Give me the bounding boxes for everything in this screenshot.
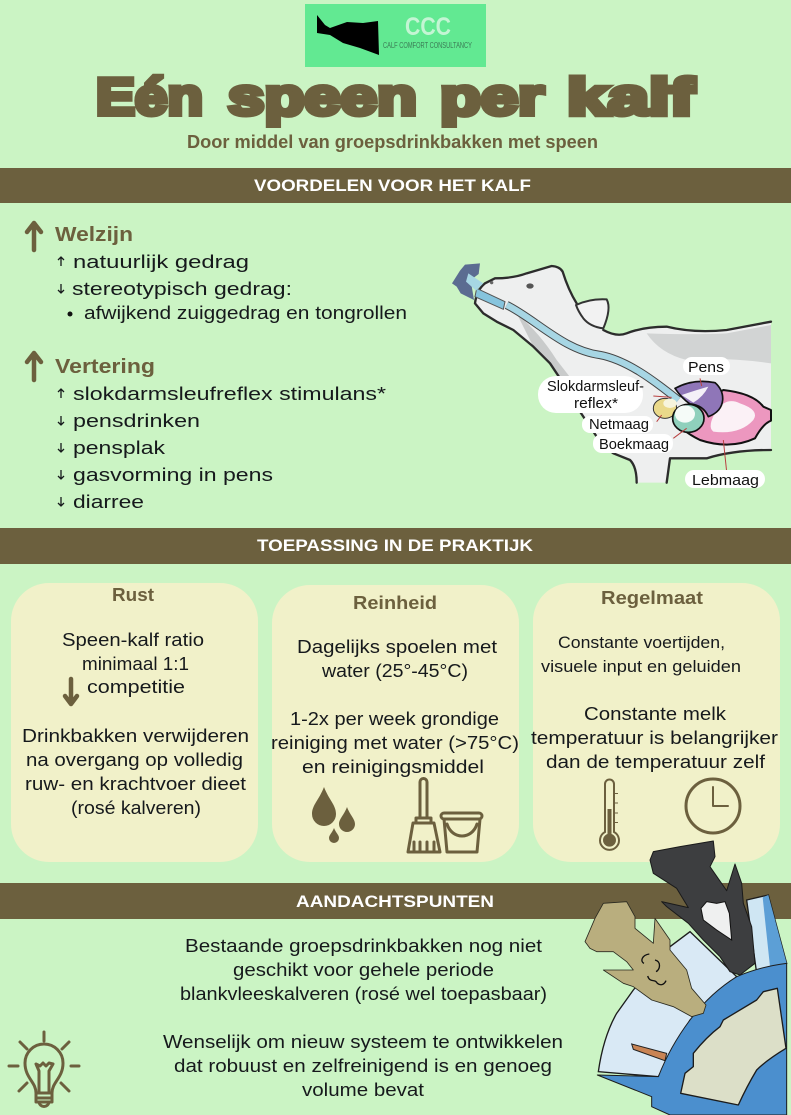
list: welzijn: natuurlijk gedrag [73,251,249,272]
icon: thermometer [600,780,619,850]
logo: CCC [405,13,451,41]
label: boekmaag: Boekmaag [599,436,669,453]
list: vertering: pensdrinken [73,410,200,431]
label: pens [683,357,730,376]
panel: regelmaat [531,583,780,862]
label: slokdarmsleuf-reflex [538,376,644,413]
label: lebmaag [685,470,765,489]
label: netmaag: Netmaag [589,416,649,433]
section header: toepassing: TOEPASSING IN DE PRAKTIJK [257,536,534,555]
title: Eén [96,68,203,126]
list: vertering: slokdarmsleufreflex stimulans* [73,383,386,404]
title: kalf [567,68,695,126]
label: lebmaag: Lebmaag [692,472,759,489]
text: aandachtspunten: blankvleeskalveren (rosé wel toepasbaar) [180,983,547,1004]
icon: water drops [312,787,355,843]
text: rust: competitie [87,676,185,697]
text: regelmaat: visuele input en geluiden [541,658,741,676]
text: reinheid [271,636,519,777]
list: welzijn: afwijkend zuiggedrag en tongrollen [84,302,407,323]
text: aandachtspunten: Bestaande groepsdrinkbakken nog niet [185,935,542,956]
illustration: calves at group drinking trough [585,841,787,1115]
text: reinheid: reiniging met water (>75°C) [271,732,519,753]
text: aandachtspunten [163,935,563,1100]
icon: light bulb [9,1032,79,1106]
title: per [440,68,544,126]
text: reinheid: water (25°-45°C) [321,660,468,681]
text: reinheid: en reinigingsmiddel [302,756,484,777]
text: rust: na overgang op volledig [26,749,243,770]
heading: welzijn: Welzijn [55,224,133,246]
icon: broom and bucket [408,779,482,852]
text: rust: (rosé kalveren) [71,797,201,818]
section header: aandachtspunten: AANDACHTSPUNTEN [296,892,494,911]
list: vertering: pensplak [73,437,166,458]
icon: arrow down [65,679,77,704]
text: aandachtspunten: Wenselijk om nieuw systeem te ontwikkelen [163,1031,563,1052]
subtitle: Door middel van groepsdrinkbakken met speen [187,132,598,152]
list: welzijn: stereotypisch gedrag: [72,278,292,299]
text: reinheid: Dagelijks spoelen met [297,636,497,657]
logo: CALF COMFORT CONSULTANCY [383,40,472,50]
text: rust: Drinkbakken verwijderen [22,725,249,746]
heading: rust: Rust [112,585,154,605]
logo [305,4,486,67]
text: reinheid: 1-2x per week grondige [290,708,499,729]
section header: voordelen: VOORDELEN VOOR HET KALF [254,176,531,195]
text: regelmaat: dan de temperatuur zelf [546,751,766,772]
label: pens: Pens [688,359,724,376]
heading: reinheid: Reinheid [353,593,437,613]
text: aandachtspunten: dat robuust en zelfreinigend is en genoeg [174,1055,552,1076]
text: rust: ruw- en krachtvoer dieet [25,773,246,794]
icon: clock [686,779,740,833]
text: aandachtspunten: volume bevat [302,1079,424,1100]
panel: rust [11,583,258,862]
text: rust: Speen-kalf ratio [62,629,204,650]
list: vertering: gasvorming in pens [73,464,273,485]
list: vertering: diarree [73,491,144,512]
list: vertering [58,383,386,512]
title [96,68,695,126]
section header: aandachtspunten [0,883,791,919]
text: rust [22,629,249,818]
illustration: calf digestive system [452,263,771,489]
text: regelmaat: Constante melk [584,703,727,724]
text: rust: minimaal 1:1 [82,653,189,674]
heading: regelmaat: Regelmaat [601,588,703,608]
text: regelmaat: Constante voertijden, [558,634,725,652]
icon: large arrow up vertering [27,353,41,380]
text: regelmaat [531,634,778,772]
text: regelmaat: temperatuur is belangrijker [531,727,778,748]
icon: large arrow up welzijn [27,223,41,250]
panel: reinheid [271,585,519,862]
label: slokdarmsleuf-reflex: Slokdarmsleuf- [547,378,644,395]
heading: vertering: Vertering [55,356,155,378]
list: welzijn [58,251,407,323]
label: slokdarmsleuf-reflex: reflex* [574,395,618,412]
section header: voordelen [0,168,791,203]
text: aandachtspunten: geschikt voor gehele periode [233,959,494,980]
section header: toepassing [0,528,791,564]
title: speen [228,68,417,126]
